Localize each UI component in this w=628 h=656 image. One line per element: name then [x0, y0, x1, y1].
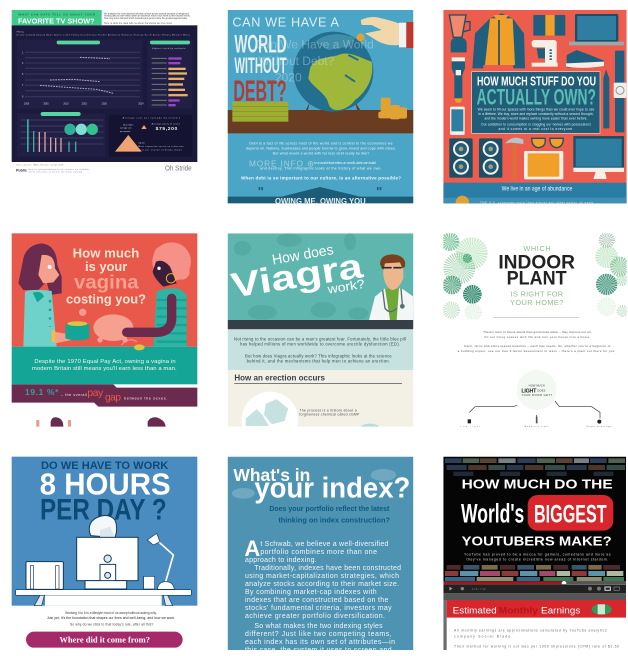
icon: wristwatch	[614, 51, 626, 132]
body text: each index has its own set of attributes—in	[245, 639, 395, 646]
hand holding coin	[357, 17, 414, 48]
subheading: thinking on index construction?	[278, 515, 390, 524]
intro text: Here is what the data tells us about the shows we love most.	[104, 22, 173, 25]
filter row	[17, 31, 190, 37]
tile: what's in your index	[228, 457, 413, 654]
figure: woman right	[127, 242, 191, 347]
moderate light plant	[524, 417, 549, 428]
banner: owing me owing you	[228, 187, 414, 204]
tile: biggest youtubers	[443, 457, 626, 650]
body text: indexes that are constructed based on the	[245, 597, 388, 604]
stat panel with triangle: Top tier	[138, 141, 145, 144]
line chart: 2015	[82, 103, 88, 105]
intro text	[458, 330, 615, 353]
dotted rule	[493, 316, 579, 319]
heading: what's in: What's in	[233, 465, 310, 485]
band: pay gap: gap	[105, 393, 121, 404]
stat panel with triangle: Cost per season of drama shows	[138, 149, 182, 152]
player controls	[443, 584, 626, 593]
heading: favorite TV show	[12, 10, 102, 26]
icon: sneaker	[566, 50, 604, 68]
intro text: There's more to house plants than good looks alone – they improve our air,	[483, 330, 592, 334]
intro text: modern Britain still means you'll earn less than a man.	[32, 366, 177, 372]
line chart	[22, 52, 144, 105]
heading: is right for your home: YOUR HOME?	[510, 298, 563, 307]
body text: company Social Blade.	[454, 634, 512, 638]
icon: notebook	[533, 15, 565, 36]
heading: how much is your: is your	[85, 259, 127, 274]
body text: t Schwab, we believe a well-diversified	[260, 541, 388, 548]
stat panel with triangle: Most expensive series on television	[138, 145, 183, 148]
horizontal bar chart	[152, 47, 188, 106]
tile: which indoor plant	[445, 236, 626, 428]
teal band	[12, 347, 197, 384]
money stack	[232, 102, 288, 122]
caption text: forgiveness chemical called cGMP	[299, 413, 360, 417]
background panel	[228, 457, 413, 650]
intro text: Working 9 to 5 is a lifestyle most of us accept without asking why.	[65, 611, 157, 615]
body text: Their method for working it out was per 1000 impressions (CPM) rate of $2.50	[454, 645, 619, 649]
watermark text: Can We Have a World	[255, 37, 374, 51]
watermark text	[257, 40, 373, 82]
flowchart: YOUR ROOM GET?	[521, 393, 553, 397]
intro panel	[228, 329, 413, 370]
icon: speaker left	[449, 138, 473, 178]
icon: laptop	[569, 14, 624, 45]
body text: different? Just like two competing teams,	[245, 631, 392, 638]
background panel	[12, 457, 197, 606]
body text: analyze stocks according to their market size.	[245, 581, 399, 588]
body text: So what makes the two indexing styles	[254, 623, 383, 630]
bottom figures	[36, 417, 166, 427]
title: how does viagra work: How does	[271, 242, 335, 269]
heading: is right for your home	[510, 289, 563, 307]
icon: coffee machine	[532, 40, 558, 67]
body text: Traditionally, indexes have been constructed	[254, 565, 401, 572]
background panel	[443, 10, 627, 203]
icon: phone	[450, 107, 465, 135]
drop cap: A	[244, 536, 260, 561]
heading: how much is your	[73, 245, 139, 274]
filter row: Filter by	[17, 31, 24, 34]
line chart: 2010	[63, 103, 69, 105]
intro text: depend on. Nations, businesses and people borrow to grow, invest and cope with crises.	[246, 146, 396, 150]
body text: Our addiction to consumption is clogging our homes with possessions	[481, 123, 591, 127]
thumbnails bottom	[445, 565, 624, 581]
coin stacks	[378, 98, 407, 119]
player controls: 3:15 / 7:42	[472, 587, 486, 591]
heading: how much do the: HOW MUCH DO THE	[462, 477, 613, 491]
banner: estimated monthly earnings: Monthly	[499, 605, 538, 615]
heading: indoor plant: PLANT	[507, 268, 567, 289]
heading: costing you: costing you?	[66, 293, 146, 307]
heading: indoor plant: INDOOR	[498, 252, 575, 273]
intro text: So why do we stick to that today's rule, after all this?	[70, 622, 153, 626]
intro text: In a world that relies on credit, debt can build	[314, 161, 376, 165]
body text: portfolio combines more than one	[260, 549, 377, 556]
icon: glasses	[532, 138, 563, 148]
line chart: 2005	[43, 103, 49, 105]
tile: how much is your vagina costing you	[12, 233, 197, 427]
intro text	[464, 553, 611, 561]
heading: world's: World's	[461, 498, 524, 528]
intro text	[246, 141, 396, 170]
coin	[122, 340, 145, 350]
figure: doctor	[369, 254, 413, 320]
clouds	[232, 469, 396, 499]
band: pay gap	[12, 384, 197, 407]
quote marks: "	[258, 184, 264, 199]
intro text: they've managed to create incredible new areas of internet stardom.	[466, 557, 608, 561]
icon: cup	[144, 576, 155, 589]
section: how an erection occurs: How an erection occurs	[234, 374, 326, 383]
banner: estimated monthly earnings	[447, 600, 626, 618]
background panel	[228, 10, 413, 203]
intro text: YouTube has proved to be a mecca for gamers, comedians and more as	[464, 553, 611, 557]
icon: desktop monitor	[573, 136, 624, 179]
background panel	[443, 457, 626, 650]
banner: age of abundance: THE U.S. consumes more than almost any other nation on earth	[480, 200, 594, 204]
band: pay gap: 19.1 %*	[25, 387, 59, 397]
bright light plant: Bright, direct light	[587, 425, 612, 428]
intro text: viewing data to learn what makes an audience return each week to their favorite show,	[104, 15, 190, 18]
heading: world without: WITHOUT	[234, 53, 287, 78]
question text: When debt is so important to our culture, is an alternative possible?	[241, 176, 401, 181]
title: how does viagra work: Viagra	[228, 247, 366, 306]
pill pattern	[234, 233, 368, 320]
footer source text	[16, 164, 89, 173]
cell shape	[360, 424, 380, 433]
filter row: Drama Comedy Reality News Sports Crime Family Documentary Thriller Animation Romance Fantasy Sci-Fi Action History Western Music	[17, 34, 190, 37]
moderate light plant: Moderate light	[524, 425, 549, 428]
body text: and it comes at a real cost to everyone.	[498, 127, 574, 131]
intro panel: Not rising to the occasion can be a man's greatest fear. Fortunately, the little blue pill	[234, 336, 406, 341]
body text: approach to indexing.	[245, 557, 317, 564]
flowchart	[461, 370, 612, 428]
icon: piggy bank	[93, 314, 133, 343]
stat panel with triangle: Average salary of actors	[152, 123, 180, 126]
intro panel: behind it, and the mechanisms that help men to achieve an erection.	[247, 359, 390, 364]
subheading: Does your portfolio reflect the latest	[269, 504, 390, 513]
more info label: MORE INFO ⊕	[249, 158, 314, 168]
heading: how much is your: How much	[73, 245, 139, 260]
tile: favorite TV show dashboard	[12, 10, 197, 173]
section: how an erection occurs	[228, 370, 413, 427]
video progress bar	[443, 581, 626, 586]
quote marks	[258, 187, 382, 190]
footer source text: Public	[16, 169, 27, 173]
flowchart: HOW MUCH	[529, 383, 545, 387]
line chart: 5	[22, 74, 24, 76]
body text: By combining market-cap indexes with	[245, 589, 377, 596]
line chart: 7	[22, 85, 24, 87]
heading: favorite TV show: FAVORITE TV SHOW?	[18, 17, 95, 26]
section label pills	[41, 41, 190, 116]
stat panel with triangle: Average cost per episode by network	[123, 117, 181, 120]
title: how does viagra work: work?	[326, 277, 366, 297]
intro text: a budding expert, use our free 3-factor assessment to learn – there's a plant out there for you	[458, 349, 615, 353]
plant decoration left	[445, 237, 480, 317]
grey side line	[443, 600, 447, 650]
logo: Oh Strategy: Oh Stride	[165, 164, 192, 173]
low light plant: Low light	[461, 425, 480, 428]
body text	[478, 107, 594, 131]
table	[228, 110, 413, 133]
icon: desktop monitor	[77, 537, 138, 589]
body text: in a lifetime. We buy, store and replace constantly without a second thought,	[478, 112, 594, 116]
panel: title box	[472, 72, 600, 133]
heading: can we have a: CAN WE HAVE A	[232, 16, 340, 30]
tile: how much stuff	[443, 10, 627, 209]
horizontal bar chart: Highest rated by audience	[152, 47, 186, 50]
thumbnails top	[445, 458, 625, 476]
diagram: hexagon cells	[242, 392, 298, 448]
icon: earth globe	[293, 32, 373, 115]
intro text: Debt is a fact of life across most of the world and is central to the economies we	[249, 141, 393, 145]
banner: estimated monthly earnings: Earnings	[541, 605, 581, 615]
intro text	[104, 12, 190, 25]
icon: speaker right	[479, 138, 502, 178]
icon: pencil	[603, 69, 609, 128]
intro text	[32, 359, 177, 372]
body text	[245, 541, 401, 654]
heading: your index: your index?	[254, 472, 410, 504]
banner: age of abundance	[443, 182, 627, 204]
banner: estimated monthly earnings: Estimated	[453, 605, 497, 615]
intro text: how long series last and which networks and genres have the greatest appeal today.	[104, 17, 188, 20]
banner: owing me owing you: OWING ME, OWING YOU	[275, 196, 366, 206]
icon: hammer	[505, 138, 523, 179]
intro text: Just yet, it's the foundation that shapes our lives and well-being, and how we work.	[47, 616, 175, 620]
intro text: Despite the 1970 Equal Pay Act, owning a vagina in	[34, 359, 176, 365]
icon: flashlight	[452, 57, 465, 103]
body text: using market-capitalization strategies, which	[245, 573, 399, 580]
body text: We seem to fill our spaces with more things than we could ever hope to use	[478, 107, 594, 111]
header panel	[228, 233, 413, 320]
heading: favorite TV show: WHAT CAN DATA TELL US ABOUT YOUR	[18, 13, 96, 17]
intro panel: But how does Viagra actually work? This infographic looks at the science	[245, 353, 392, 358]
intro text: fill our living spaces with life and turn your house into a home.	[484, 335, 590, 339]
heading: is right for your home: IS RIGHT FOR	[511, 289, 563, 298]
line chart: 9	[22, 97, 24, 99]
footer source text: online with notes on each of the shows included	[29, 170, 82, 173]
band: pay gap: pay	[87, 388, 104, 399]
line chart: 1	[22, 52, 24, 54]
plant decoration right	[601, 236, 626, 314]
icon: blender	[449, 15, 470, 52]
heading: 8 hours: 8 HOURS	[40, 468, 171, 502]
button: where did it come from: Where did it come from?	[59, 635, 150, 644]
banner: age of abundance: We live in an age of abundance	[502, 187, 573, 193]
grey band	[443, 593, 626, 600]
heading: per day: PER DAY ?	[40, 493, 167, 526]
badge: biggest	[528, 495, 613, 531]
heading: indoor plant	[498, 252, 575, 289]
tile: world without debt	[228, 10, 414, 206]
band: pay gap: – the overall	[61, 393, 87, 397]
stat panel with triangle: average cost	[120, 127, 132, 130]
line chart: 2000	[24, 103, 30, 105]
low light plant	[461, 419, 480, 428]
intro text: Cacti, ferns and shiny-leaved beauties – each has needs. So, whether you're a beginner or	[464, 344, 611, 348]
video frame	[443, 457, 626, 582]
line chart: 2020	[102, 103, 108, 105]
caption text: The process is a history about a	[299, 408, 357, 412]
flowchart: DOES	[537, 389, 546, 393]
heading: world without	[234, 34, 286, 73]
footer source text: Sources and methodology for this analysis are available	[29, 168, 89, 171]
figure: woman left	[18, 243, 72, 347]
tile: 8 hours per day	[12, 457, 197, 648]
heading: do we have to work: DO WE HAVE TO WORK	[41, 460, 169, 472]
watermark text: Without Debt?	[258, 54, 335, 68]
stat panel with triangle: $2.5 million	[123, 124, 133, 126]
stat panel with triangle: $75,200	[156, 126, 178, 132]
tile: how does viagra work	[228, 233, 413, 448]
icon: jacket	[472, 13, 525, 68]
footer source text: Data sources: IMDb, Nielsen ratings 2019	[17, 164, 63, 167]
button: where did it come from	[26, 632, 183, 648]
bar chart: vertical bars	[21, 119, 103, 152]
stat panel with triangle: per episode	[120, 130, 131, 133]
flowchart: LIGHT	[521, 388, 537, 394]
heading: youtubers make: YOUTUBERS MAKE?	[462, 535, 612, 549]
band: pay gap: between the sexes.	[124, 396, 167, 401]
quote marks: "	[376, 184, 382, 199]
icon: desk lamp	[147, 533, 174, 589]
icon: money stack	[592, 604, 612, 615]
desk	[16, 590, 191, 606]
intro text: But what would a world with far less debt really be like?	[273, 151, 369, 155]
caption text	[299, 408, 360, 417]
body text: this case, the system it uses to screen and	[245, 647, 392, 654]
intro text: and destroy. This infographic looks at the history of what we owe.	[260, 166, 382, 170]
dark band	[228, 320, 413, 329]
heading: which: WHICH	[523, 244, 551, 253]
heading: debt: DEBT?	[233, 75, 287, 108]
intro panel: has helped millions of men worldwide to overcome erectile dysfunction (ED).	[240, 342, 400, 347]
figure: person behind monitor	[89, 515, 117, 538]
intro text: We analyzed the most watched television shows across several decades of ratings and	[104, 12, 190, 15]
body text	[454, 629, 619, 649]
body text: stocks' fundamental criteria, investors may	[245, 605, 392, 612]
panel: dark dashboard	[12, 25, 197, 162]
icon: tablet	[524, 151, 563, 179]
subheading	[269, 504, 390, 524]
body text: and the modern world makes owning more easier than ever before.	[484, 116, 588, 120]
line chart: 2024	[138, 103, 144, 105]
stat panel with triangle	[115, 117, 183, 152]
stat circles	[64, 124, 98, 135]
bright light plant	[587, 420, 612, 428]
intro text	[47, 611, 175, 626]
body text: achieve greater portfolio diversification.	[245, 613, 385, 620]
line chart: 3	[22, 63, 24, 65]
icon: folder	[26, 562, 63, 589]
icon: purse with coins	[65, 309, 89, 340]
background panel	[12, 233, 197, 347]
title: how does viagra work	[228, 242, 366, 306]
heading: world without: WORLD	[234, 30, 287, 58]
body text: All monthly earnings are approximations calculated by YouTube analytics	[454, 629, 607, 633]
heading: vagina: vagina	[74, 272, 139, 293]
watermark text: 2020	[275, 70, 302, 84]
